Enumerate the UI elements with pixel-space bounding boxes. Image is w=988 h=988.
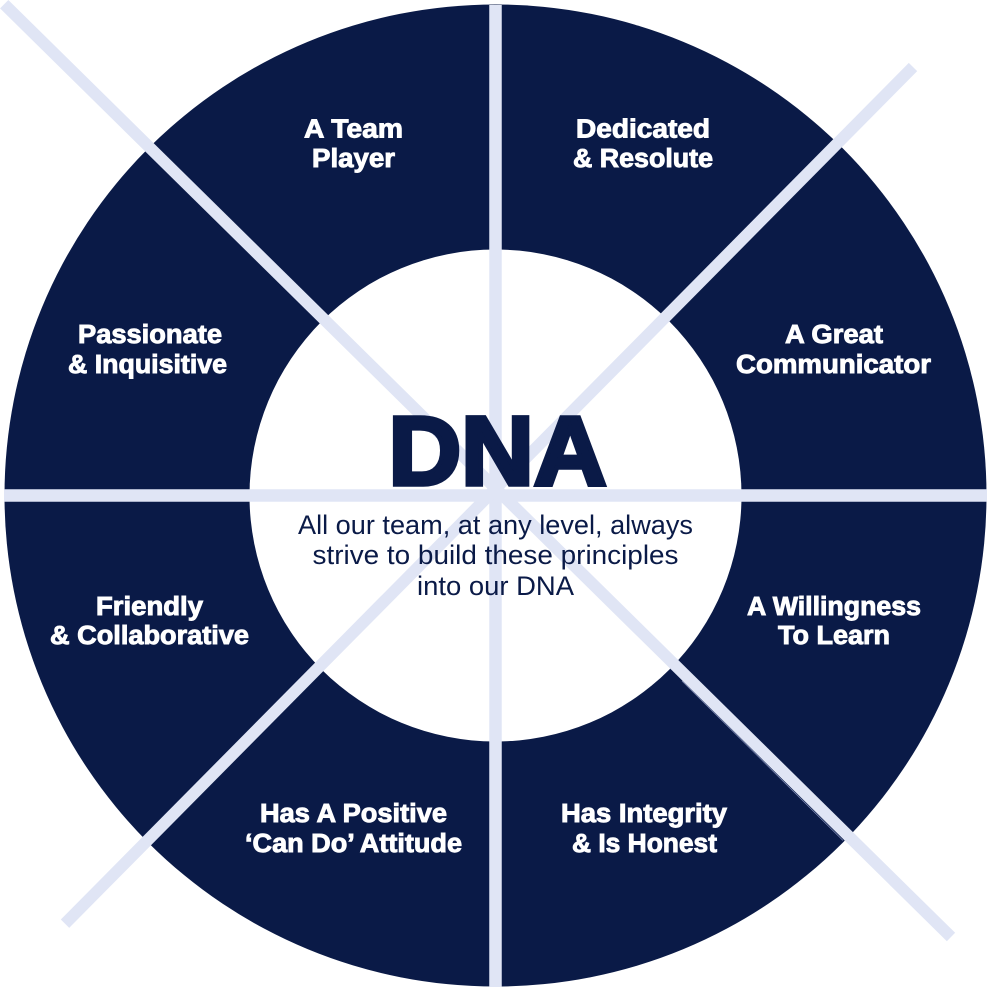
- label: Passionate & Inquisitive: [68, 321, 227, 379]
- centre description: All our team, at any level, always: [298, 510, 693, 540]
- label: Dedicated & Resolute: & Resolute: [573, 145, 713, 173]
- label: Friendly & Collaborative: & Collaborative: [50, 622, 249, 650]
- label: A Team Player: Player: [312, 145, 395, 173]
- label: A Willingness To Learn: To Learn: [778, 622, 890, 650]
- label: Has Integrity & Is Honest: & Is Honest: [572, 830, 718, 858]
- label: Passionate & Inquisitive: & Inquisitive: [68, 351, 227, 379]
- label: Has Integrity & Is Honest: Has Integrity: [561, 800, 728, 828]
- hairline beside lower-right divider: [682, 681, 843, 840]
- label: A Great Communicator: Communicator: [736, 351, 931, 379]
- label: Dedicated & Resolute: Dedicated: [576, 116, 710, 144]
- inner white circle: [250, 250, 742, 742]
- label: A Team Player: A Team: [304, 116, 403, 144]
- heading: DNA: DNA: [388, 396, 606, 506]
- label: Has A Positive 'Can Do' Attitude: Has A Positive: [260, 800, 447, 828]
- centre description: [298, 510, 693, 601]
- label: A Willingness To Learn: [747, 593, 921, 650]
- label: Dedicated & Resolute: [573, 116, 713, 173]
- label: Has A Positive 'Can Do' Attitude: [245, 800, 462, 858]
- label: A Great Communicator: [736, 321, 931, 379]
- label: Friendly & Collaborative: Friendly: [96, 593, 204, 621]
- label: Has A Positive 'Can Do' Attitude: ‘Can Do’ Attitude: [245, 830, 462, 858]
- label: Has Integrity & Is Honest: [561, 800, 728, 858]
- centre description: into our DNA: [417, 571, 574, 601]
- centre description: strive to build these principles: [312, 540, 678, 570]
- label: A Great Communicator: A Great: [785, 321, 884, 349]
- label: A Willingness To Learn: A Willingness: [747, 593, 921, 621]
- label: A Team Player: [304, 116, 403, 173]
- label: Passionate & Inquisitive: Passionate: [78, 321, 222, 349]
- label: Friendly & Collaborative: [50, 593, 249, 650]
